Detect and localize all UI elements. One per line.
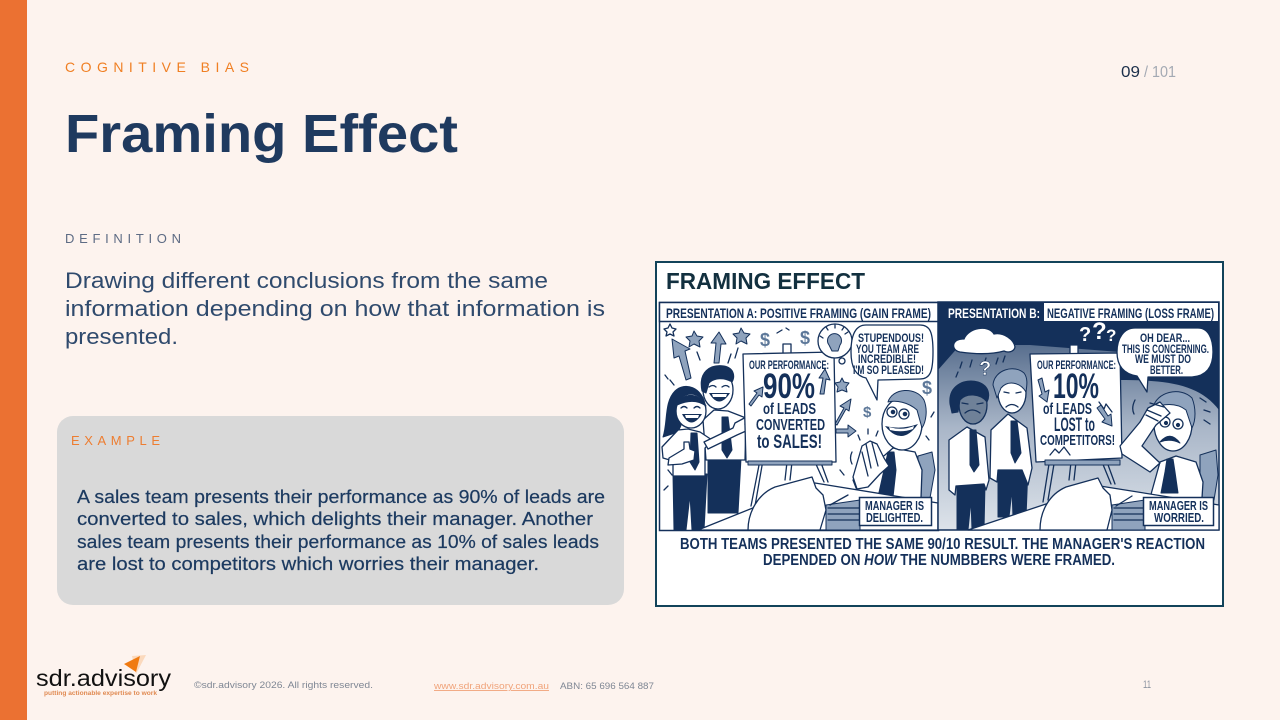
caption box: manager is worried: WORRIED.: [1154, 511, 1204, 525]
speech bubble: oh dear: WE MUST DO: [1135, 354, 1191, 366]
rain cloud and question marks: [954, 318, 1116, 380]
caption box: manager is delighted: [860, 498, 932, 526]
easel: [1043, 345, 1115, 502]
definition text: [65, 268, 605, 349]
presenters: [662, 366, 751, 530]
caption box: manager is worried: [1144, 498, 1214, 526]
speech bubble: stupendous: STUPENDOUS!: [858, 331, 924, 345]
page counter: [1121, 64, 1176, 81]
presentation board: 90%: [763, 367, 815, 406]
rising arrows and stars: $: [760, 330, 770, 350]
illustration caption: BOTH TEAMS PRESENTED THE SAME 90/10 RESULT. THE MANAGER'S REACTION: [680, 536, 1205, 553]
example text: [77, 486, 605, 574]
definition label: DEFINITION: [65, 231, 181, 246]
speech bubble: oh dear: BETTER.: [1150, 365, 1183, 377]
panel: example: [57, 416, 624, 605]
comic panel B: negative framing: PRESENTATION B:: [948, 305, 1040, 321]
rain cloud and question marks: ?: [1106, 326, 1116, 345]
worried team: [949, 369, 1032, 530]
page counter: 09: [1121, 64, 1140, 81]
presentation board: [1030, 353, 1122, 465]
illustration caption: DEPENDED ON HOW THE NUMBBERS WERE FRAMED.: [763, 552, 1115, 569]
thought bubble with lightbulb: [818, 324, 852, 364]
rising arrows and stars: $: [922, 378, 932, 398]
speech bubble: oh dear: OH DEAR...: [1140, 333, 1190, 345]
panel: framing effect illustration: [656, 262, 1223, 606]
caption box: manager is worried: MANAGER IS: [1149, 499, 1208, 513]
presentation board: of LEADS: [1043, 401, 1092, 418]
definition text: Drawing different conclusions from the same: [65, 268, 548, 293]
logo: sdr.advisory: putting actionable expertise to work: [44, 691, 158, 697]
eyebrow: cognitive bias: COGNITIVE BIAS: [65, 59, 249, 75]
presentation board: OUR PERFORMANCE:: [749, 360, 829, 372]
example text: sales team presents their performance as 10% of sales leads: [77, 531, 599, 552]
caption box: manager is delighted: DELIGHTED.: [866, 511, 923, 525]
comic panel A: positive framing: [660, 302, 938, 530]
logo: sdr.advisory: sdr.advisory: [36, 665, 172, 691]
presentation board: to SALES!: [757, 432, 822, 453]
footer abn: ABN: 65 696 564 887: [560, 681, 654, 691]
speech bubble: stupendous: I'M SO PLEASED!: [853, 365, 924, 377]
worried manager: [1120, 392, 1218, 500]
presentation board: of LEADS: [763, 401, 816, 418]
definition text: presented.: [65, 324, 178, 349]
presentation board: 10%: [1053, 367, 1099, 406]
footer website link: www.sdr.advisory.com.au: [433, 681, 549, 691]
rising arrows and stars: $: [800, 328, 810, 348]
presentation board: [743, 352, 836, 465]
speech bubble: stupendous: INCREDIBLE!: [858, 354, 916, 366]
presentation board: LOST to: [1054, 415, 1095, 436]
presentation board: COMPETITORS!: [1040, 432, 1115, 449]
page counter: / 101: [1144, 64, 1176, 81]
example text: converted to sales, which delights their manager. Another: [77, 508, 593, 529]
title: Framing Effect: [65, 104, 458, 164]
comic panel A: positive framing: PRESENTATION A: POSITIVE FRAMING (GAIN FRAME): [666, 305, 931, 321]
desk and foreground silhouette: [968, 478, 1219, 530]
footer slide number: 11: [1143, 679, 1151, 691]
speech bubble: stupendous: YOU TEAM ARE: [856, 344, 919, 356]
orange side bar: [0, 0, 27, 720]
footer copyright: ©sdr.advisory 2026. All rights reserved.: [194, 680, 373, 690]
presentation board: OUR PERFORMANCE:: [1037, 360, 1116, 372]
speech bubble: oh dear: THIS IS CONCERNING.: [1122, 344, 1209, 356]
illustration title: FRAMING EFFECT: [666, 268, 865, 294]
easel: [751, 344, 828, 506]
rain cloud and question marks: ?: [1079, 324, 1091, 346]
speech bubble: stupendous: [851, 325, 933, 400]
definition text: information depending on how that information is: [65, 296, 605, 321]
rain cloud and question marks: ?: [1092, 318, 1107, 345]
comic panel B: negative framing: [938, 302, 1219, 530]
illustration caption: [680, 536, 1205, 569]
caption box: manager is delighted: MANAGER IS: [865, 499, 924, 513]
speech bubble: oh dear: [1117, 328, 1213, 392]
example label: EXAMPLE: [71, 433, 160, 448]
rising arrows and stars: [664, 324, 934, 490]
presentation board: CONVERTED: [756, 417, 825, 434]
rising arrows and stars: $: [863, 404, 872, 421]
example text: A sales team presents their performance as 90% of leads are: [77, 486, 605, 507]
delighted manager: [850, 390, 935, 498]
rain cloud and question marks: ?: [979, 358, 991, 380]
example text: are lost to competitors which worries their manager.: [77, 553, 539, 574]
logo: sdr.advisory: [36, 655, 172, 697]
desk and foreground silhouette: [698, 477, 938, 530]
